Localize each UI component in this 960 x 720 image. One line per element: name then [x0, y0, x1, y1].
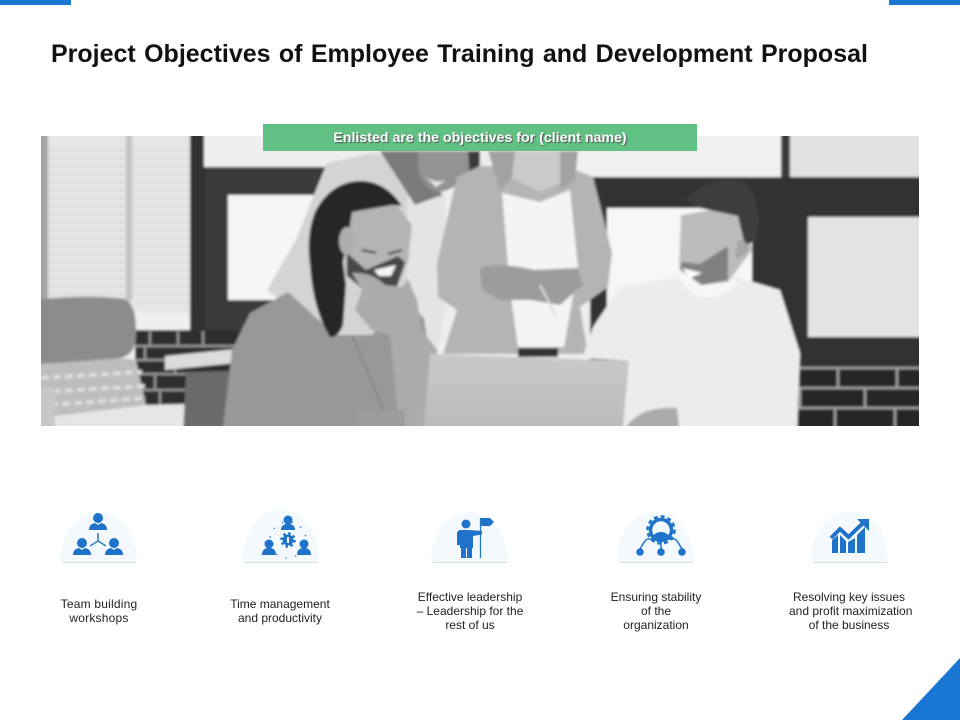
caption [789, 590, 912, 632]
banner: Enlisted are the objectives for (client name) [333, 130, 627, 146]
woman left: neck and face [380, 151, 442, 205]
brick wall left [135, 330, 245, 405]
icon: people around gear [242, 510, 319, 563]
caption: of the business [809, 618, 889, 632]
woman left: top [267, 153, 447, 353]
icon: rising bar chart [811, 512, 888, 563]
caption: workshops [69, 611, 129, 625]
man right: head [679, 205, 752, 285]
caption: and profit maximization [789, 604, 912, 618]
icon: three people network [60, 512, 137, 563]
caption: Resolving key issues [793, 590, 905, 604]
mug [356, 410, 405, 437]
dark frame left [190, 125, 207, 330]
caption: Team building [61, 597, 137, 611]
item 5: resolving key issues [789, 512, 912, 632]
caption: Effective leadership [418, 590, 522, 604]
item 4: ensuring stability [611, 512, 702, 632]
caption: rest of us [445, 618, 495, 632]
laptop [423, 354, 629, 437]
item 3: effective leadership [416, 512, 523, 632]
caption: and productivity [238, 611, 322, 625]
photo: team around a laptop [41, 136, 919, 426]
caption [611, 590, 702, 632]
woman centre: jacket [437, 166, 612, 354]
caption: Time management [230, 597, 330, 611]
title: Project Objectives of Employee Training and Development Proposal [51, 40, 868, 68]
right windows [570, 125, 782, 180]
caption [60, 597, 137, 625]
caption [230, 597, 330, 625]
top right accent [889, 0, 960, 5]
man right: sweater [582, 272, 800, 437]
furniture [30, 297, 136, 365]
man left: hair [309, 181, 402, 337]
caption: Ensuring stability [611, 590, 701, 604]
man left: hand and arm [352, 273, 437, 437]
icon: gear with nodes [617, 512, 694, 563]
man left: tee [222, 292, 428, 437]
item 1: team building [60, 512, 137, 625]
caption: of the [641, 604, 671, 618]
item 2: time management [230, 510, 330, 625]
top left accent [0, 0, 71, 5]
caption: organization [623, 618, 689, 632]
icon: leader with flag [431, 512, 508, 563]
corner triangle [902, 658, 960, 720]
blinds [30, 125, 196, 316]
banner [263, 124, 697, 151]
man left: face [345, 203, 412, 290]
caption [416, 590, 523, 632]
brick right [795, 366, 930, 437]
caption: – Leadership for the [417, 604, 523, 618]
